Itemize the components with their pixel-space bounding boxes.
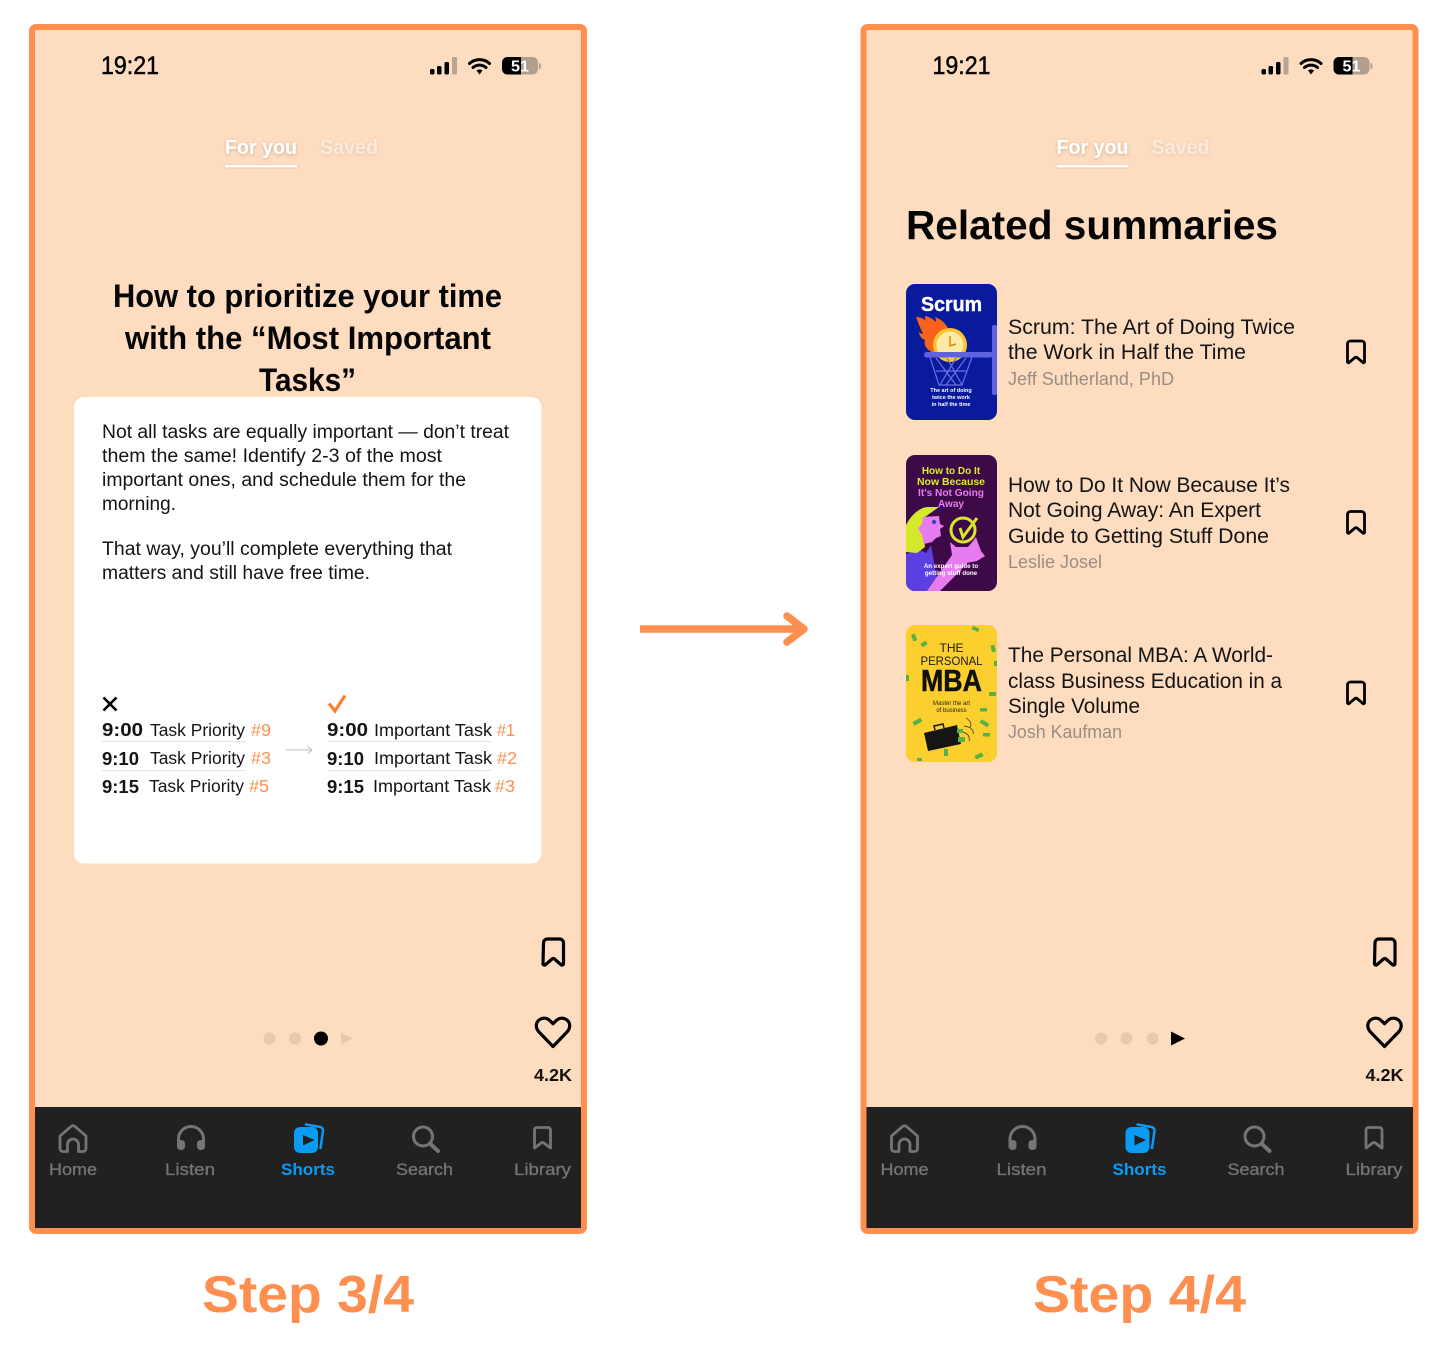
nav: Search (1228, 1127, 1284, 1179)
icon: bookmark (543, 939, 564, 965)
icon: bookmark (1347, 512, 1365, 533)
icon: cross (104, 698, 116, 710)
status bar time: 19:21 (101, 52, 159, 80)
phone frame and background (864, 27, 1416, 1231)
bottom navigation (866, 1107, 1413, 1228)
body text: morning. (102, 494, 176, 515)
icon: bookmark (1374, 939, 1395, 965)
book text: How to Do It Now: Not Going Away: An Expert (1008, 499, 1261, 522)
bottom navigation (35, 1107, 581, 1228)
nav: Listen: Listen (165, 1160, 215, 1179)
schedule: after: 9:15 (327, 776, 364, 797)
schedule: after (327, 696, 517, 797)
nav: Listen (996, 1126, 1046, 1179)
panel: phone step 4 (864, 27, 1416, 1231)
book text: The Personal MBA (1008, 644, 1282, 742)
nav: Shorts: Shorts (1112, 1160, 1166, 1179)
heading (113, 278, 502, 398)
book cover: The Personal MBA: THE (940, 641, 964, 655)
book cover: How to Do It Now (906, 455, 997, 591)
book text: How to Do It Now: Guide to Getting Stuff Done (1008, 525, 1269, 548)
schedule: after: 9:10 (327, 748, 364, 769)
like count: 4.2K (534, 1065, 572, 1085)
body text: them the same! Identify 2-3 of the most (102, 446, 443, 467)
book cover: The Personal MBA: PERSONAL (920, 654, 983, 668)
schedule: after: #2 (497, 748, 517, 768)
book cover: The Personal MBA: Master the art (933, 701, 970, 707)
book text: How to Do It Now: How to Do It Now Because It’s (1008, 474, 1290, 497)
nav: Shorts (281, 1124, 335, 1179)
book cover: How to Do It Now: getting stuff done (925, 570, 978, 577)
book cover: Scrum: twice the work (932, 395, 971, 401)
book text: The Personal MBA: Single Volume (1008, 695, 1140, 718)
tab: Saved: Saved (320, 137, 378, 159)
phone frame and background (32, 27, 584, 1231)
status icons: 51 (1342, 58, 1361, 76)
heading: related summaries: Related summaries (906, 202, 1278, 248)
arrow between phones (640, 625, 802, 633)
schedule: before: 9:10 (102, 748, 139, 769)
icon: bookmark (1347, 341, 1365, 363)
tab: For you: For you (1056, 137, 1128, 159)
book cover: The Personal MBA: of business (936, 708, 967, 714)
tab: For you: For you (225, 137, 297, 159)
heading: Tasks” (259, 362, 356, 398)
schedule: before: #5 (249, 776, 269, 796)
nav: Search: Search (396, 1160, 453, 1179)
heading: with the “Most Important (124, 320, 491, 356)
body text (102, 422, 510, 584)
schedule: before: #3 (251, 748, 271, 768)
book text: The Personal MBA: Josh Kaufman (1008, 722, 1122, 742)
book text: The Personal MBA: class Business Education in a (1008, 670, 1282, 693)
book row: How to Do It Now (906, 455, 1365, 591)
book text: How to Do It Now (1008, 474, 1290, 572)
nav: Home (49, 1126, 97, 1179)
nav: Shorts (1112, 1124, 1166, 1179)
nav: Listen: Listen (996, 1160, 1046, 1179)
caption: Step 3/4: Step 3/4 (202, 1266, 414, 1324)
nav: Search: Search (1228, 1160, 1284, 1179)
schedule: after: Important Task (374, 748, 492, 768)
book cover: How to Do It Now: It's Not Going (918, 488, 984, 499)
like count: 4.2K (1366, 1065, 1404, 1085)
schedule: before: 9:00 (102, 719, 143, 740)
nav: Library: Library (514, 1160, 572, 1179)
heading: How to prioritize your time (113, 278, 502, 314)
schedule: after: #1 (497, 720, 515, 740)
book text: How to Do It Now: Leslie Josel (1008, 552, 1102, 572)
book cover: How to Do It Now: Now Because (917, 477, 985, 488)
book text: Scrum: the Work in Half the Time (1008, 341, 1246, 364)
status bar time: 19:21 (932, 52, 990, 80)
book row: The Personal MBA (906, 625, 1365, 762)
book row: Scrum (906, 284, 1365, 420)
tab: Saved: Saved (1152, 137, 1210, 159)
book cover: The Personal MBA (906, 625, 997, 762)
white content card (74, 397, 542, 864)
book cover: Scrum: Scrum (921, 294, 982, 316)
nav: Listen (165, 1127, 215, 1179)
book text: Scrum: Jeff Sutherland, PhD (1008, 369, 1174, 389)
book text: Scrum: Scrum: The Art of Doing Twice (1008, 316, 1295, 339)
schedule: after: Important Task (373, 776, 491, 796)
status icons (430, 57, 541, 76)
nav: Home: Home (49, 1160, 97, 1179)
nav: Library (1346, 1128, 1403, 1179)
book cover: Scrum: in half the time (932, 402, 970, 408)
body text: important ones, and schedule them for the (102, 470, 466, 491)
panel: phone step 3 (32, 27, 584, 1231)
schedule: after: 9:00 (327, 719, 368, 740)
book cover: How to Do It Now: How to Do It (922, 466, 981, 477)
small arrow between schedules (286, 746, 312, 754)
schedule: before: Task Priority (149, 776, 244, 796)
body text: matters and still have free time. (102, 563, 370, 584)
schedule: before (102, 698, 271, 797)
caption: Step 4/4: Step 4/4 (1033, 1266, 1246, 1324)
schedule: before: #9 (251, 720, 271, 740)
status icons (1262, 57, 1372, 76)
nav: Search (396, 1127, 453, 1179)
book cover: The Personal MBA: MBA (921, 663, 982, 698)
nav: Library (514, 1128, 572, 1179)
body text: That way, you’ll complete everything that (102, 539, 453, 560)
schedule: after: #3 (495, 776, 515, 796)
schedule: before: Task Priority (150, 720, 245, 740)
schedule: after: Important Task (374, 720, 492, 740)
nav: Library: Library (1346, 1160, 1403, 1179)
body text: Not all tasks are equally important — don’t treat (102, 422, 510, 443)
nav: Home: Home (880, 1160, 928, 1179)
icon: heart (1368, 1018, 1401, 1046)
book cover: How to Do It Now: Away (938, 499, 964, 510)
book cover: Scrum: The art of doing (930, 388, 972, 394)
pagination dots (264, 1032, 352, 1046)
icon: heart (536, 1018, 570, 1046)
book cover: How to Do It Now: An expert guide to (924, 563, 978, 570)
book text: Scrum (1008, 316, 1295, 389)
icon: check (329, 696, 345, 711)
pagination dots (1095, 1032, 1185, 1046)
schedule: before: 9:15 (102, 776, 139, 797)
nav: Shorts: Shorts (281, 1160, 335, 1179)
icon: bookmark (1347, 682, 1365, 704)
nav: Home (880, 1126, 928, 1179)
arrow head (787, 616, 804, 642)
status icons: 51 (511, 58, 529, 76)
book cover: Scrum (906, 284, 997, 420)
schedule: before: Task Priority (150, 748, 245, 768)
book text: The Personal MBA: The Personal MBA: A World- (1008, 644, 1273, 667)
